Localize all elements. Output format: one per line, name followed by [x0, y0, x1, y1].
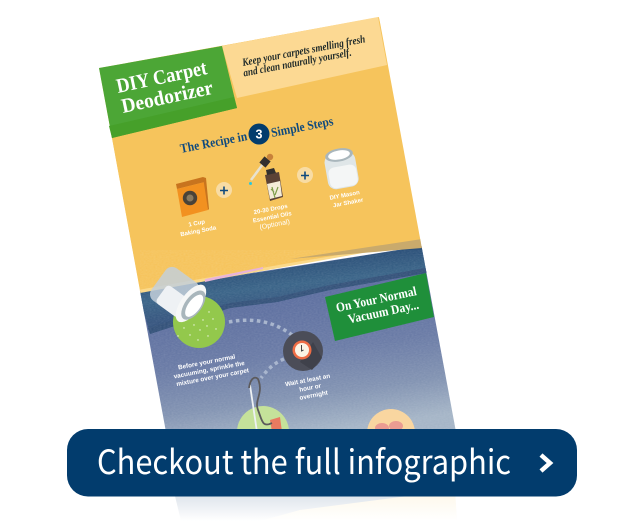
icon: baking soda box: [176, 177, 209, 217]
arrow: dotted path to clock: [229, 320, 292, 335]
label: baking soda: Baking Soda: [180, 225, 217, 238]
panel: yellow recipe background: [99, 17, 430, 292]
page reflection: [175, 490, 457, 521]
banner text: Vacuum Day...: [347, 297, 420, 326]
heading: recipe steps: [179, 113, 334, 156]
heading: recipe steps: The Recipe in: [179, 128, 249, 156]
icon: peach circle: [367, 409, 415, 457]
label: wait time: hour or: [299, 383, 322, 394]
label: essential oils: (Optional): [259, 219, 291, 231]
tagline text: Keep your carpets smelling fresh: [240, 33, 366, 69]
label: sprinkle instructions: mixture over your carpet: [176, 367, 251, 388]
icon: mason jar: [323, 146, 360, 191]
number badge: [248, 124, 270, 144]
icon: vacuum circle: [237, 378, 289, 458]
heading: recipe steps: Simple Steps: [270, 113, 334, 140]
title banner: [99, 46, 237, 138]
label: sprinkle instructions: vacuuming, sprinkle the: [173, 360, 246, 381]
label: baking soda: 1 Cup: [188, 219, 206, 229]
tagline text: and clean naturally yourself.: [242, 47, 353, 79]
label: wait time: Wait at least an: [285, 373, 331, 388]
icon: chevron: [541, 455, 550, 471]
title text: DIY Carpet: [114, 57, 209, 98]
title text: Deodorizer: [119, 77, 215, 118]
icon: plus one: [216, 182, 232, 198]
infographic page: [99, 17, 470, 440]
header band: tagline: [222, 17, 387, 98]
label: mason jar: DIY Mason: [329, 190, 361, 202]
banner text: On Your Normal: [335, 283, 418, 315]
icon: tipped jar: [146, 262, 213, 328]
number badge: 3: [256, 128, 263, 142]
banner text: [335, 283, 420, 326]
icon: green sprinkle circle: [173, 296, 225, 348]
banner: vacuum day: [325, 273, 434, 341]
icon: essential oil dropper: [249, 154, 283, 201]
label: wait time: overnight: [299, 389, 329, 402]
label: essential oils: Essential Oils: [252, 211, 293, 225]
label: sprinkle instructions: Before your normal: [178, 354, 236, 372]
button: checkout: [67, 429, 577, 496]
button label: Checkout the full infographic: [97, 435, 511, 484]
arrow: dotted path to vacuum: [261, 359, 284, 378]
label: mason jar: Jar Shaker: [333, 197, 365, 209]
title text: [114, 57, 215, 118]
label: essential oils: 20-30 Drops: [253, 204, 289, 216]
panel: lavender field: [140, 239, 456, 429]
icon: clock: [283, 331, 323, 371]
icon: plus two: [297, 167, 313, 183]
